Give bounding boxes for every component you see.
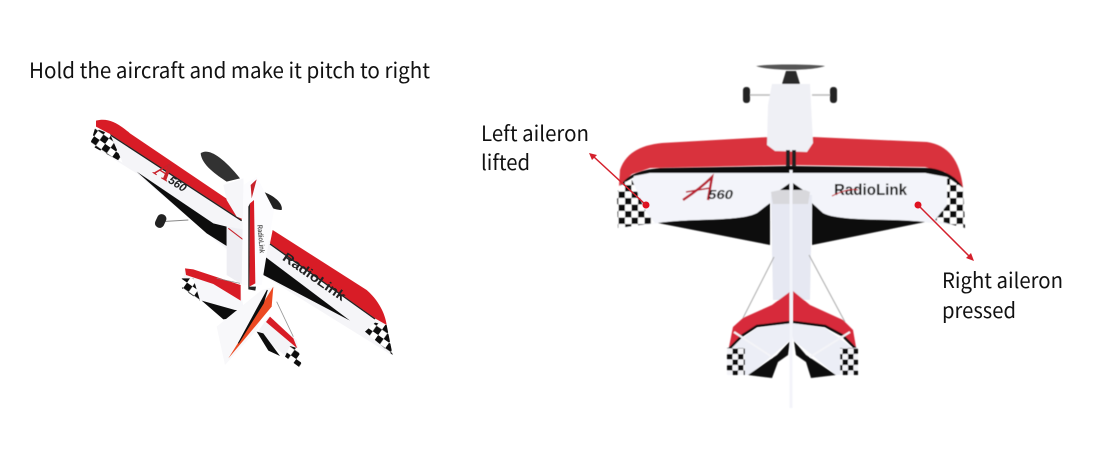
wing white underside <box>618 173 955 228</box>
label: left aileron lifted: lifted <box>481 147 530 177</box>
cowl <box>767 84 813 152</box>
propeller <box>201 152 240 182</box>
tail left <box>182 268 244 319</box>
tail right <box>257 317 302 369</box>
arrow: left aileron lifted <box>589 153 650 208</box>
label: right aileron pressed: pressed <box>942 295 1016 325</box>
wing black band <box>620 166 963 188</box>
tailplane <box>727 291 858 378</box>
label: right aileron pressed: Right aileron <box>942 265 1063 295</box>
illustration: aircraft pitched to the right: 560 <box>166 175 189 195</box>
tail wires <box>743 255 845 322</box>
landing gear <box>743 87 837 103</box>
illustration: aircraft pitched to the right: RadioLink <box>255 224 267 254</box>
label: right aileron pressed <box>942 265 1063 325</box>
wing logo: RadioLink: RadioLink <box>834 182 907 199</box>
instruction heading: Hold the aircraft and make it pitch to right <box>29 55 430 85</box>
illustration: aircraft pitched to the right: A <box>148 154 179 187</box>
black wing root triangles <box>658 203 770 245</box>
wing red leading edge <box>96 120 243 220</box>
arrow: right aileron pressed <box>914 202 974 261</box>
wing logos: RadioLink <box>280 250 349 304</box>
illustration: aircraft pitched to the right <box>90 120 393 369</box>
wing tip checkers <box>90 128 123 163</box>
vertical fin <box>217 278 293 365</box>
wing red leading edge <box>619 137 963 188</box>
fin edge <box>790 170 792 408</box>
propeller and spinner <box>756 64 825 84</box>
wing logo: A560: 560 <box>708 187 734 202</box>
fuselage <box>771 195 812 300</box>
wing underside <box>91 127 392 355</box>
wing black undersides <box>137 172 227 246</box>
left aileron checkers <box>617 180 655 228</box>
label: left aileron lifted <box>481 118 589 177</box>
wing logo: A560 <box>683 177 734 202</box>
label: left aileron lifted: Left aileron <box>481 118 589 148</box>
right aileron checkers <box>935 177 965 228</box>
illustration: aircraft rear view <box>617 64 965 408</box>
landing wheel <box>162 220 188 222</box>
fuselage <box>223 178 245 220</box>
